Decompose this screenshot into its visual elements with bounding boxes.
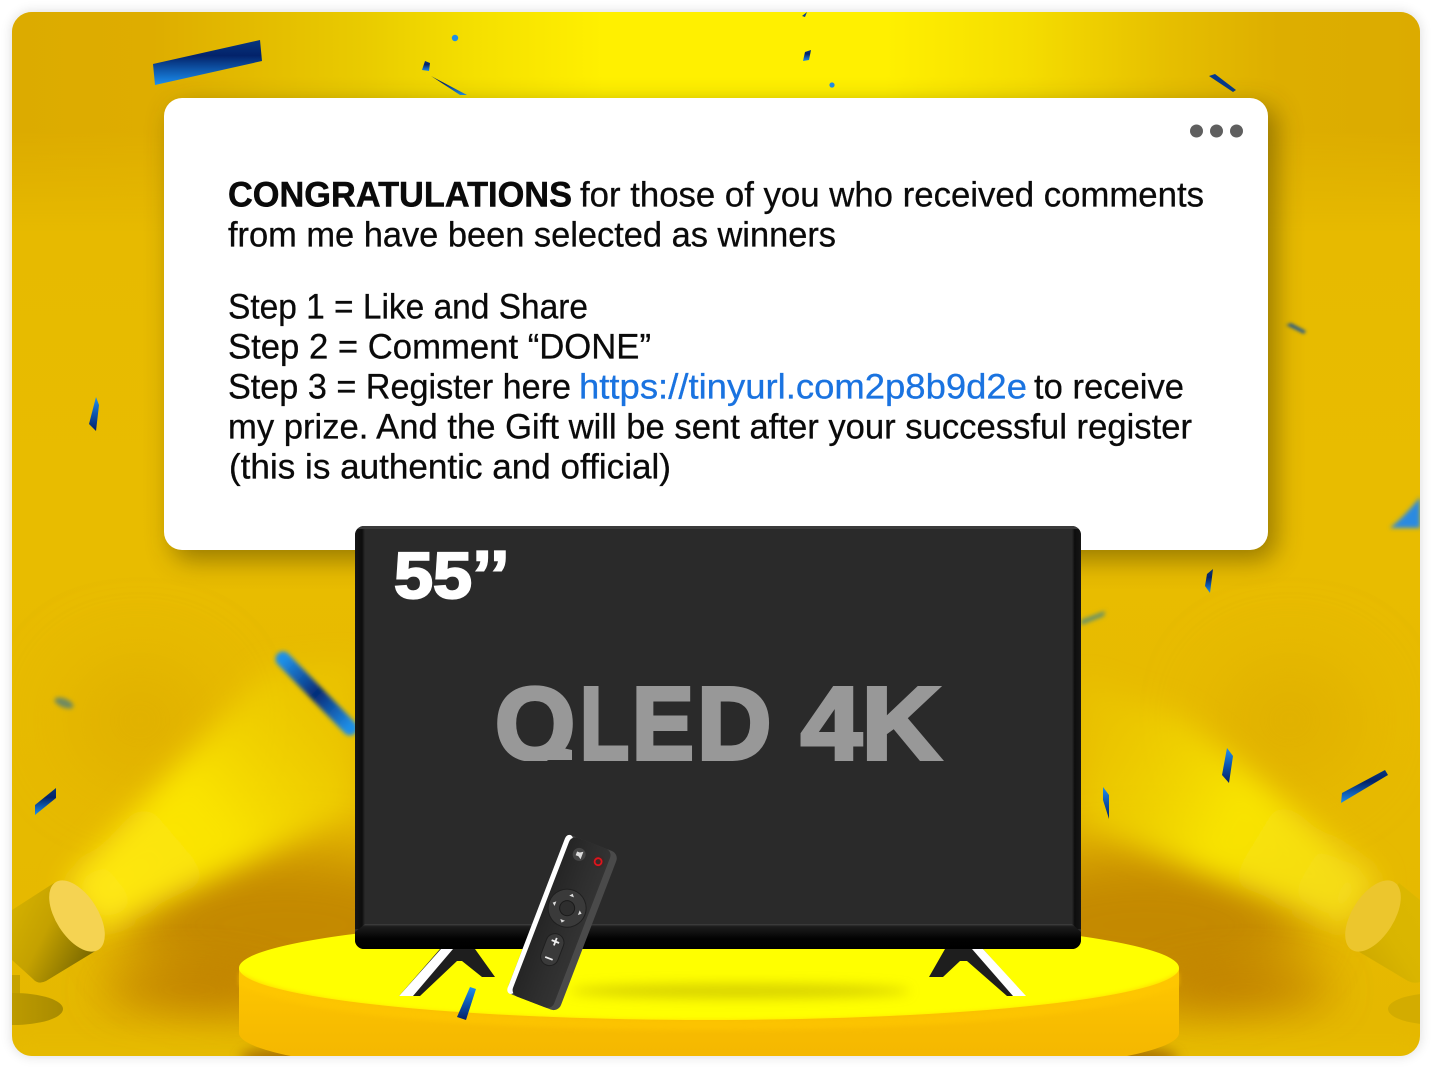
steps text: to receive <box>1034 368 1184 406</box>
steps text: Step 3 = Register here <box>228 368 571 406</box>
tv size label: ’’ <box>473 537 509 611</box>
steps text: Step 2 = Comment “DONE” <box>228 328 651 366</box>
stage floor shadow <box>236 1044 290 1056</box>
tv size label <box>394 537 509 612</box>
d-pad <box>543 884 592 933</box>
tv body <box>355 526 1081 949</box>
icon: more dots <box>1190 124 1243 138</box>
steps text: (this is authentic and official) <box>229 448 671 486</box>
confetti over stage <box>457 987 476 1020</box>
volume rocker <box>538 931 567 968</box>
tv model label: D <box>697 666 771 781</box>
tv size label: 55 <box>394 539 472 612</box>
steps text: https://tinyurl.com2p8b9d2e <box>579 368 1027 406</box>
tv leg: left <box>399 949 495 996</box>
tv model label: Q <box>495 666 575 781</box>
lamp: right spotlight <box>1345 880 1420 1024</box>
light beam: right <box>1080 680 1378 928</box>
steps text: Step 1 = Like and Share <box>228 288 588 326</box>
steps text: my prize. And the Gift will be sent after your successful register <box>228 408 1192 446</box>
headline text: for those of you who received comments <box>580 176 1204 214</box>
card shadow <box>172 106 1276 560</box>
headline text <box>228 176 1204 254</box>
tv model label <box>497 685 944 761</box>
podium stage <box>238 934 1180 1056</box>
television <box>355 526 1081 996</box>
headline text: CONGRATULATIONS <box>228 176 572 214</box>
steps text <box>228 288 1192 486</box>
message card <box>164 98 1268 550</box>
light beam: left <box>65 660 355 932</box>
tv leg: right <box>929 949 1026 996</box>
button: volume icon <box>571 846 588 863</box>
lamp: left spotlight <box>12 880 105 1025</box>
remote control <box>506 834 619 1012</box>
button: power <box>590 853 607 870</box>
headline text: from me have been selected as winners <box>228 216 836 254</box>
confetti pieces <box>35 12 1420 819</box>
tv model label: E <box>632 665 694 781</box>
tv model label: 4K <box>801 667 941 781</box>
tv model label: L <box>580 665 629 781</box>
